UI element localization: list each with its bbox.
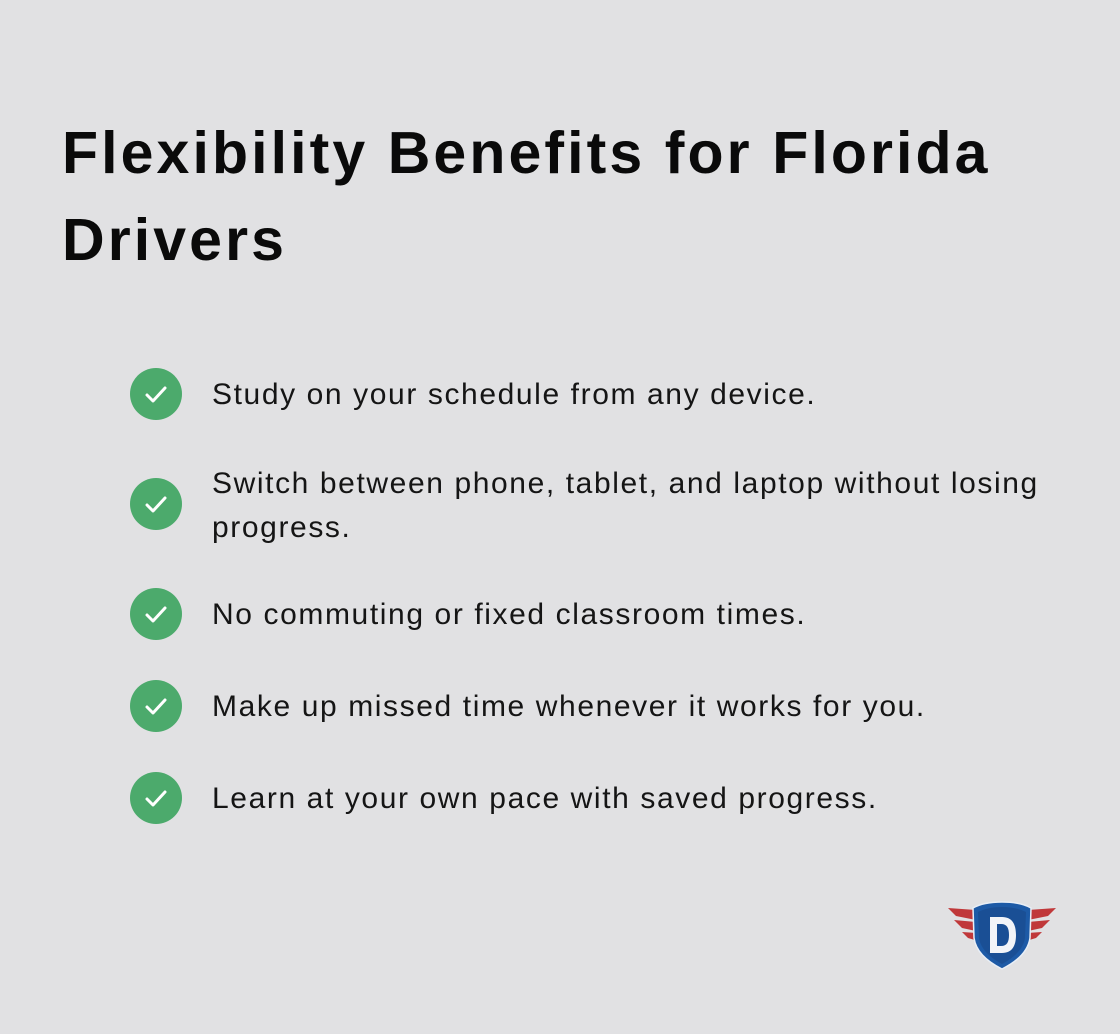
text: Switch between phone, tablet, and laptop without losing progress. [212,467,1039,544]
text: Study on your schedule from any device. [212,378,816,411]
item 3 [130,588,806,640]
title [62,120,991,273]
item 4 [130,680,926,732]
item 1 [130,368,816,420]
text: Learn at your own pace with saved progress. [212,782,878,815]
logo [948,901,1056,970]
icon: check [130,368,182,420]
title: Flexibility Benefits for Florida [62,120,991,186]
text: No commuting or fixed classroom times. [212,598,806,631]
title: Drivers [62,207,287,273]
icon: check [130,772,182,824]
icon: check [130,478,182,530]
text: Make up missed time whenever it works for you. [212,690,926,723]
icon: check [130,680,182,732]
item 5 [130,772,878,824]
item 2 [130,467,1039,544]
icon: check [130,588,182,640]
